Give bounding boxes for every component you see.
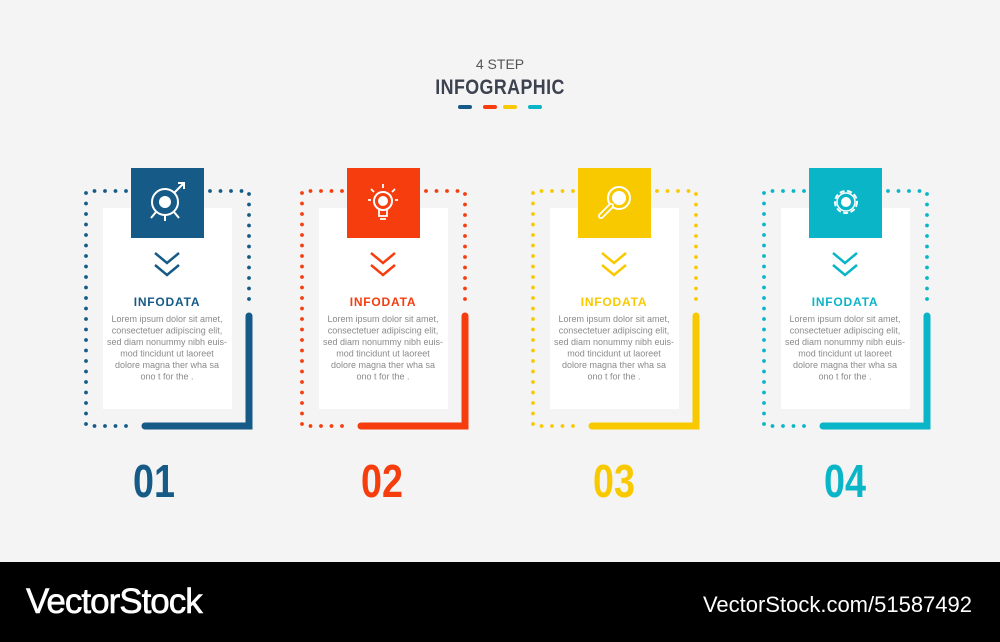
text block: Lorem ipsum dolor sit amet, bbox=[111, 314, 223, 324]
icon: gear bbox=[809, 168, 882, 238]
text block: ono t for the . bbox=[356, 372, 410, 382]
panel: step 4 bbox=[764, 168, 927, 507]
text block bbox=[785, 314, 905, 382]
text block: mod tincidunt ut laoreet bbox=[120, 348, 214, 358]
chevron arrow bbox=[155, 253, 179, 275]
chevron arrow bbox=[602, 253, 626, 275]
text block bbox=[554, 314, 674, 382]
heading: INFODATA bbox=[134, 295, 200, 309]
text block: dolore magna ther wha sa bbox=[562, 360, 666, 370]
text block: ono t for the . bbox=[587, 372, 641, 382]
text block: sed diam nonummy nibh euis- bbox=[554, 337, 674, 347]
text block bbox=[323, 314, 443, 382]
text block: Lorem ipsum dolor sit amet, bbox=[558, 314, 670, 324]
panel: step 3 bbox=[533, 168, 696, 507]
heading: INFODATA bbox=[812, 295, 878, 309]
text block: Lorem ipsum dolor sit amet, bbox=[789, 314, 901, 324]
chevron arrow bbox=[371, 253, 395, 275]
panel: step 2 bbox=[302, 168, 465, 507]
text block bbox=[107, 314, 227, 382]
text block: sed diam nonummy nibh euis- bbox=[785, 337, 905, 347]
text block: mod tincidunt ut laoreet bbox=[336, 348, 430, 358]
text block: ono t for the . bbox=[818, 372, 872, 382]
text block: mod tincidunt ut laoreet bbox=[567, 348, 661, 358]
heading: INFODATA bbox=[581, 295, 647, 309]
title bbox=[435, 56, 565, 107]
text block: consectetuer adipiscing elit, bbox=[328, 326, 438, 336]
text block: sed diam nonummy nibh euis- bbox=[107, 337, 227, 347]
text block: dolore magna ther wha sa bbox=[793, 360, 897, 370]
icon: target bbox=[131, 168, 204, 238]
icon: light bulb bbox=[347, 168, 420, 238]
text block: dolore magna ther wha sa bbox=[331, 360, 435, 370]
number: 03 bbox=[593, 455, 635, 507]
heading: INFODATA bbox=[350, 295, 416, 309]
title: 4 STEP bbox=[476, 56, 524, 72]
text block: Lorem ipsum dolor sit amet, bbox=[327, 314, 439, 324]
footer bar: VectorStock.com/51587492 bbox=[703, 592, 972, 617]
icon: magnifier bbox=[578, 168, 651, 238]
number: 01 bbox=[133, 455, 175, 507]
title: INFOGRAPHIC bbox=[435, 76, 565, 99]
text block: ono t for the . bbox=[140, 372, 194, 382]
footer bar: VectorStock bbox=[26, 582, 203, 621]
panel: step 1 bbox=[86, 168, 249, 507]
text block: consectetuer adipiscing elit, bbox=[112, 326, 222, 336]
text block: consectetuer adipiscing elit, bbox=[790, 326, 900, 336]
chevron arrow bbox=[833, 253, 857, 275]
number: 02 bbox=[361, 455, 403, 507]
text block: sed diam nonummy nibh euis- bbox=[323, 337, 443, 347]
text block: dolore magna ther wha sa bbox=[115, 360, 219, 370]
number: 04 bbox=[824, 455, 866, 507]
text block: mod tincidunt ut laoreet bbox=[798, 348, 892, 358]
text block: consectetuer adipiscing elit, bbox=[559, 326, 669, 336]
footer bar bbox=[0, 562, 1000, 642]
